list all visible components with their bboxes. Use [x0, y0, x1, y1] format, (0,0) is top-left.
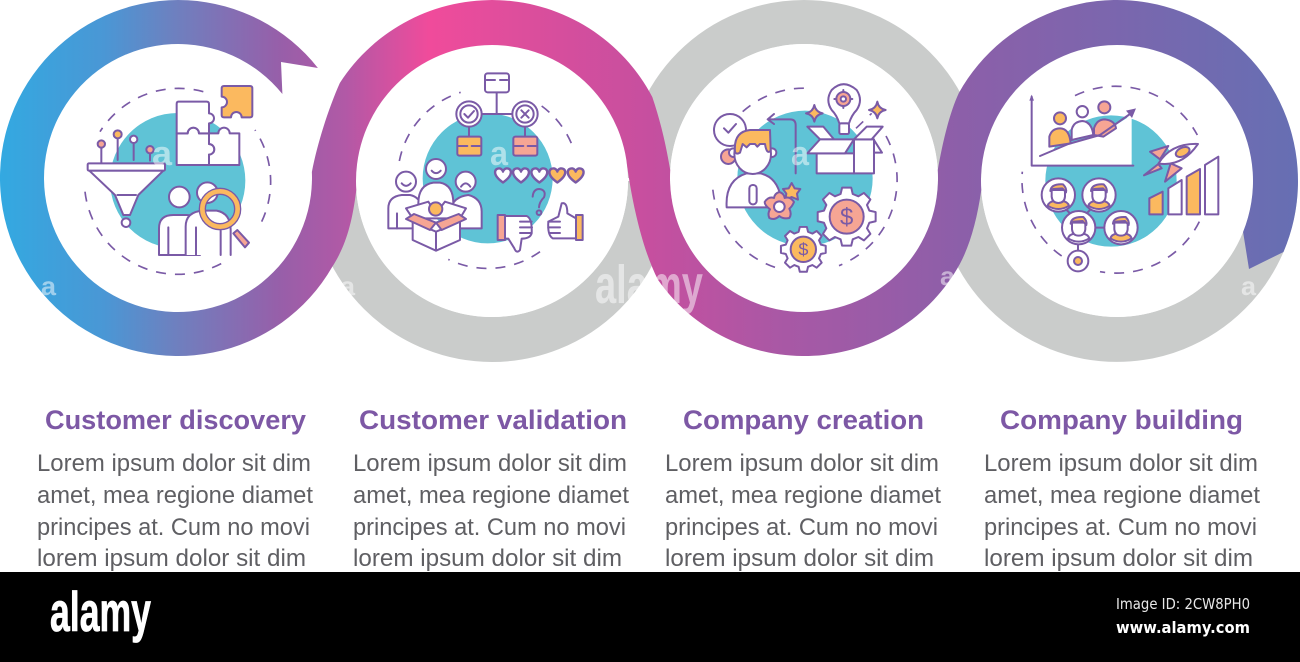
teal blob [737, 111, 873, 246]
text block: company creation [665, 450, 941, 572]
text block: company creation: lorem ipsum dolor sit dim [665, 545, 934, 572]
watermark: stock photo marks: a [791, 135, 810, 173]
funnel with data points [88, 130, 165, 227]
footer url: www.alamy.com [1116, 618, 1250, 637]
decision tree [456, 73, 538, 156]
text block: company building: lorem ipsum dolor sit dim [984, 545, 1253, 572]
text block: company creation: amet, mea regione diamet [665, 482, 941, 509]
text block: company building: principes at. Cum no movi [984, 514, 1257, 541]
text block: customer validation: principes at. Cum no movi [353, 514, 626, 541]
text block: company building: Lorem ipsum dolor sit dim [984, 450, 1258, 477]
white disc: step 2 [356, 45, 628, 317]
text block: customer validation: Lorem ipsum dolor sit dim [353, 450, 627, 477]
icon: customer discovery [85, 86, 271, 274]
growth chart [1029, 95, 1136, 166]
people under magnifier [159, 182, 249, 255]
gradient ribbon timeline [0, 0, 1298, 356]
watermark: stock photo marks: a [490, 135, 509, 173]
watermark: stock photo marks: a [340, 271, 356, 301]
text block: company building: amet, mea regione diamet [984, 482, 1260, 509]
footer image id: Image ID: 2CW8PH0 [1116, 595, 1250, 613]
founder figure [727, 130, 781, 207]
teal blob [110, 113, 245, 248]
thumbs up [548, 203, 583, 240]
large dollar gear: $ [840, 204, 853, 231]
gray ring segment: step 2 lower [334, 181, 650, 340]
white disc: step 1 [44, 44, 312, 312]
gray ring segment: step 3 upper [648, 22, 960, 178]
text block: customer validation [353, 450, 629, 572]
white disc: step 4 [981, 45, 1253, 317]
rocket [1144, 139, 1201, 182]
dashed orbit [712, 88, 897, 267]
white disc: step 3 [670, 44, 938, 312]
lightbulb with gear [828, 84, 860, 134]
text block: customer validation: amet, mea regione diamet [353, 482, 629, 509]
icon: customer validation [388, 73, 584, 268]
three people [388, 159, 482, 228]
large dollar gear [818, 188, 876, 246]
text block: customer discovery: lorem ipsum dolor sit dim [37, 545, 306, 572]
icon: company creation [712, 84, 897, 272]
watermark: stock photo marks: a [152, 135, 173, 173]
heading: customer discovery: Customer discovery [45, 405, 306, 435]
bar chart [1149, 157, 1218, 214]
text block: customer discovery [37, 450, 313, 572]
text block: customer discovery: amet, mea regione diamet [37, 482, 313, 509]
watermark: stock photo marks: a [1241, 271, 1257, 301]
teal blob [1045, 115, 1177, 247]
small dollar gear [781, 227, 826, 272]
heading: company creation: Company creation [683, 405, 924, 435]
text block: customer discovery: principes at. Cum no movi [37, 514, 310, 541]
text block: company creation: principes at. Cum no movi [665, 514, 938, 541]
question mark [533, 189, 545, 215]
dashed orbit [1022, 86, 1199, 273]
heading: company building: Company building [1000, 405, 1243, 435]
team network [1042, 178, 1138, 271]
text block: company creation: Lorem ipsum dolor sit dim [665, 450, 939, 477]
watermark: stock photo marks: a [940, 261, 956, 291]
teal blob [423, 113, 553, 243]
heading: customer validation: Customer validation [359, 405, 627, 435]
dashed orbit [85, 88, 271, 274]
thumbs down [498, 215, 532, 252]
open box with idea [807, 127, 883, 173]
text block: customer validation: lorem ipsum dolor sit dim [353, 545, 622, 572]
footer bar [0, 572, 1300, 662]
watermark: stock photo marks: alamy [595, 255, 703, 315]
dashed orbit [399, 92, 573, 268]
watermark: stock photo marks: a [41, 271, 57, 301]
rating hearts [495, 168, 584, 182]
small cog and star [765, 183, 800, 219]
gray ring segment: step 4 lower [958, 181, 1276, 339]
icon: company building [1022, 86, 1218, 273]
sparkles [806, 102, 886, 122]
text block: company building [984, 450, 1260, 572]
open box [406, 202, 466, 251]
footer logo: alamy [50, 580, 151, 643]
watermark: stock photo marks [41, 135, 1257, 315]
lightbulb with check [714, 114, 746, 164]
small dollar gear: $ [798, 240, 808, 260]
feedback arrow [768, 114, 796, 173]
puzzle pieces [177, 86, 252, 165]
text block: customer discovery: Lorem ipsum dolor sit dim [37, 450, 311, 477]
